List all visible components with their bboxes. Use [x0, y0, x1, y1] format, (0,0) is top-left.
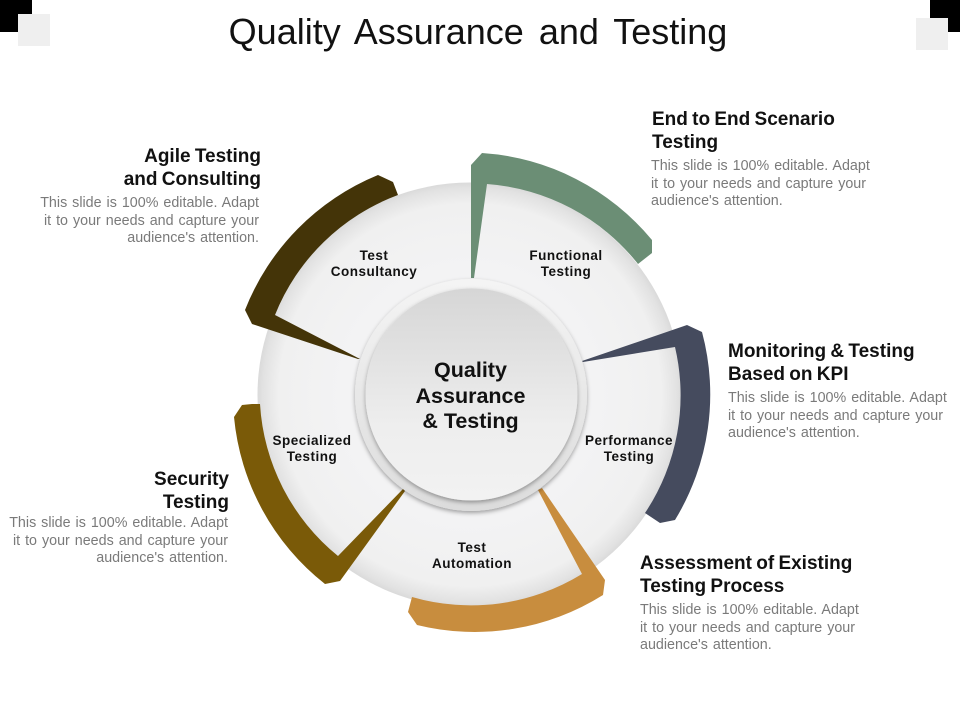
- label: test automation: Automation: [432, 556, 512, 571]
- text block: end to end: [651, 109, 870, 209]
- label: specialized testing: Specialized: [272, 433, 352, 448]
- text block: security: [9, 469, 229, 566]
- segment: agile (dark brown): [245, 175, 398, 359]
- text block: agile: [40, 146, 261, 246]
- label: test automation: Test: [458, 540, 486, 555]
- text block: security: Testing: [163, 492, 229, 513]
- text block: agile: and Consulting: [124, 169, 261, 190]
- text block: assessment: [640, 553, 859, 653]
- text block: end to end: End to End Scenario: [652, 109, 835, 130]
- text block: end to end: This slide is 100% editable. Adapt: [651, 158, 870, 174]
- label: test consultancy: Consultancy: [331, 264, 417, 279]
- label: specialized testing: [272, 433, 352, 464]
- text block: monitoring: it to your needs and capture your: [728, 408, 943, 424]
- text block: monitoring: Monitoring & Testing: [728, 341, 915, 362]
- corner mark: top right: [916, 0, 960, 50]
- segment: monitoring (navy): [582, 325, 710, 523]
- corner mark: top left: [0, 0, 50, 46]
- label: performance testing: [585, 433, 673, 464]
- center label: & Testing: [422, 409, 519, 433]
- label: performance testing: Performance: [585, 433, 673, 448]
- text block: assessment: Assessment of Existing: [640, 553, 852, 574]
- text block: end to end: it to your needs and capture your: [651, 176, 866, 192]
- text block: end to end: Testing: [652, 132, 718, 153]
- label: functional testing: [529, 248, 603, 279]
- text block: assessment: audience's attention.: [640, 637, 772, 653]
- center label: [416, 358, 525, 433]
- label: functional testing: Functional: [529, 248, 603, 263]
- text block: security: audience's attention.: [96, 550, 228, 566]
- text block: security: Security: [154, 469, 229, 490]
- text block: security: it to your needs and capture your: [13, 532, 228, 548]
- text block: monitoring: [728, 341, 947, 441]
- center label: Assurance: [416, 384, 525, 408]
- text block: agile: This slide is 100% editable. Adapt: [40, 195, 259, 211]
- text block: assessment: it to your needs and capture your: [640, 620, 855, 636]
- segment: end to end scenario (green): [471, 153, 652, 278]
- center label: Quality: [434, 358, 507, 382]
- text block: agile: Agile Testing: [144, 146, 261, 167]
- label: test consultancy: [331, 248, 417, 279]
- text block: assessment: Testing Process: [640, 576, 784, 597]
- outer disc: [258, 182, 682, 608]
- text block: monitoring: This slide is 100% editable. Adapt: [728, 390, 947, 406]
- text block: agile: it to your needs and capture your: [44, 212, 259, 228]
- label: test automation: [432, 540, 512, 571]
- center disc: [366, 288, 578, 500]
- text block: security: This slide is 100% editable. Adapt: [9, 515, 228, 531]
- label: performance testing: Testing: [604, 449, 654, 464]
- segment: assessment (orange): [408, 488, 605, 632]
- text block: assessment: This slide is 100% editable. Adapt: [640, 602, 859, 618]
- title: Quality Assurance and Testing: [229, 11, 727, 52]
- text block: monitoring: audience's attention.: [728, 425, 860, 441]
- center ring: [355, 279, 587, 511]
- label: functional testing: Testing: [541, 264, 591, 279]
- text block: monitoring: Based on KPI: [728, 364, 848, 385]
- label: specialized testing: Testing: [287, 449, 337, 464]
- label: test consultancy: Test: [360, 248, 388, 263]
- text block: end to end: audience's attention.: [651, 193, 783, 209]
- segment: security (olive brown): [234, 404, 405, 584]
- text block: agile: audience's attention.: [127, 230, 259, 246]
